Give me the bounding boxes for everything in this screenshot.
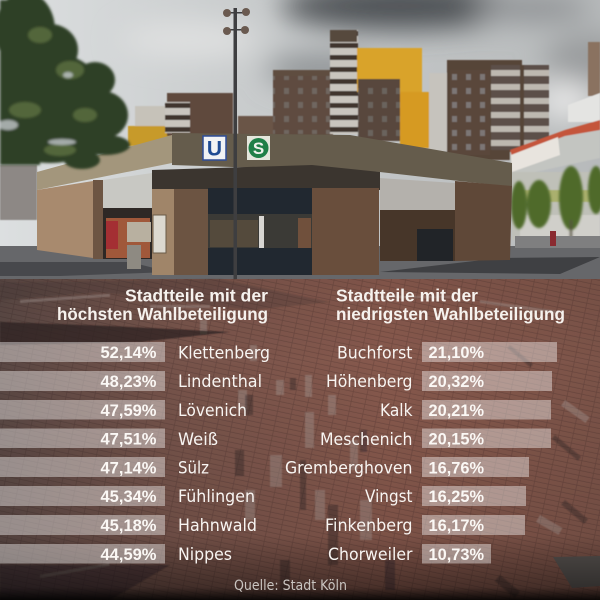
source note: Quelle: Stadt Köln	[234, 578, 347, 594]
row: Vingst	[365, 486, 526, 507]
dark pavement bottom-left	[0, 565, 170, 600]
roof band: left	[37, 135, 172, 190]
row: Lindenthal: Lindenthal	[178, 372, 262, 392]
right opening	[380, 178, 455, 261]
sign: S-Bahn: S	[253, 139, 264, 158]
notice board	[153, 215, 166, 253]
row: Fühlingen: 45,34%	[100, 487, 156, 506]
sign: U-Bahn	[203, 136, 226, 160]
row: Weiß: Weiß	[178, 430, 218, 450]
row: Sülz: Sülz	[178, 458, 209, 478]
right column heading: niedrigsten Wahlbeteiligung	[336, 304, 565, 324]
row: Fühlingen	[0, 486, 255, 507]
row: Chorweiler	[328, 544, 491, 565]
row: Lövenich	[0, 400, 247, 421]
waste bin	[127, 245, 141, 269]
row: Finkenberg: Finkenberg	[325, 516, 412, 536]
row: Buchforst: Buchforst	[337, 344, 413, 364]
background high-rise buildings	[0, 30, 600, 243]
row: Lövenich: 47,59%	[100, 401, 156, 420]
row: Chorweiler: 10,73%	[428, 545, 484, 564]
row: Klettenberg: Klettenberg	[178, 344, 270, 364]
left pillar	[152, 189, 174, 275]
building: left yellow block	[128, 126, 170, 146]
row: Gremberghoven: Gremberghoven	[285, 458, 412, 478]
row: Nippes: Nippes	[178, 545, 232, 565]
left column heading	[57, 286, 268, 324]
building: yellow tower	[357, 48, 422, 92]
row: Gremberghoven: 16,76%	[428, 458, 484, 478]
row: Lindenthal	[0, 371, 262, 392]
paved ground	[0, 279, 600, 600]
row: Höhenberg	[326, 371, 552, 392]
row: Finkenberg: 16,17%	[428, 516, 484, 535]
photo background: sky with clouds	[0, 0, 600, 285]
building: right brown tower	[447, 60, 522, 160]
right pillar	[312, 188, 379, 275]
row: Weiß: 47,51%	[100, 430, 156, 448]
recess under roof	[152, 165, 380, 190]
building: left pale block	[135, 106, 170, 128]
row: Gremberghoven	[285, 457, 529, 478]
row: Sülz: 47,14%	[100, 458, 156, 478]
row: Nippes	[0, 544, 232, 565]
sign: S-Bahn	[247, 136, 270, 160]
row: Hahnwald: 45,18%	[100, 516, 156, 535]
bar chart: lowest turnout	[285, 342, 557, 565]
trees at right	[511, 166, 600, 245]
row: Nippes: 44,59%	[100, 545, 156, 564]
sign: U-Bahn: U	[207, 138, 222, 160]
shopping centre	[510, 93, 600, 243]
row: Meschenich: Meschenich	[320, 430, 412, 450]
row: Sülz	[0, 457, 209, 478]
left wall	[37, 181, 93, 258]
row: Höhenberg: 20,32%	[428, 372, 484, 391]
building: white striped tower	[330, 30, 358, 134]
building: central brown tower	[273, 70, 333, 136]
row: Weiß	[0, 428, 218, 450]
row: Hahnwald	[0, 515, 257, 536]
row: Meschenich	[320, 428, 551, 450]
row: Kalk: Kalk	[380, 401, 413, 421]
building: far left grey	[0, 165, 37, 220]
row: Buchforst	[337, 342, 557, 364]
row: Lövenich: Lövenich	[178, 401, 247, 421]
right column heading	[336, 286, 565, 324]
pale and dark bricks	[0, 279, 590, 600]
row: Klettenberg	[0, 342, 270, 364]
roof band: front	[172, 133, 512, 187]
row: Meschenich: 20,15%	[428, 430, 484, 448]
row: Buchforst: 21,10%	[428, 343, 484, 362]
building: right balconies	[491, 65, 549, 150]
building: left balconies	[165, 102, 190, 133]
row: Finkenberg	[325, 515, 525, 536]
left wall dark side	[93, 180, 103, 259]
row: Vingst: Vingst	[365, 487, 413, 507]
tree shadow on pavement	[0, 322, 230, 345]
row: Fühlingen: Fühlingen	[178, 487, 255, 507]
building: low brown block	[238, 116, 278, 136]
station building	[37, 133, 512, 275]
left column heading: Stadtteile mit der	[125, 286, 268, 306]
building: top-right tan tower	[588, 42, 600, 96]
building: yellow lower tower	[400, 92, 429, 148]
row: Hahnwald: Hahnwald	[178, 516, 257, 536]
left column heading: höchsten Wahlbeteiligung	[57, 304, 268, 324]
building: left brown block	[167, 93, 233, 136]
building: brown balconies	[358, 79, 400, 141]
pale paving slab	[553, 556, 600, 588]
left opening	[103, 173, 152, 259]
right wall	[455, 181, 512, 261]
row: Klettenberg: 52,14%	[100, 343, 156, 362]
lamp post	[223, 8, 250, 286]
row: Lindenthal: 48,23%	[100, 372, 156, 391]
person in red	[550, 231, 556, 246]
front dark panel	[208, 188, 313, 275]
bar chart: highest turnout	[0, 342, 270, 565]
row: Kalk: 20,21%	[428, 401, 484, 420]
building: white side tower	[429, 73, 449, 151]
row: Vingst: 16,25%	[428, 487, 484, 506]
tree at left	[0, 0, 130, 169]
ground plaza	[0, 231, 600, 282]
row: Chorweiler: Chorweiler	[328, 545, 413, 565]
row: Höhenberg: Höhenberg	[326, 372, 412, 392]
row: Kalk	[380, 400, 551, 421]
right column heading: Stadtteile mit der	[336, 286, 478, 306]
